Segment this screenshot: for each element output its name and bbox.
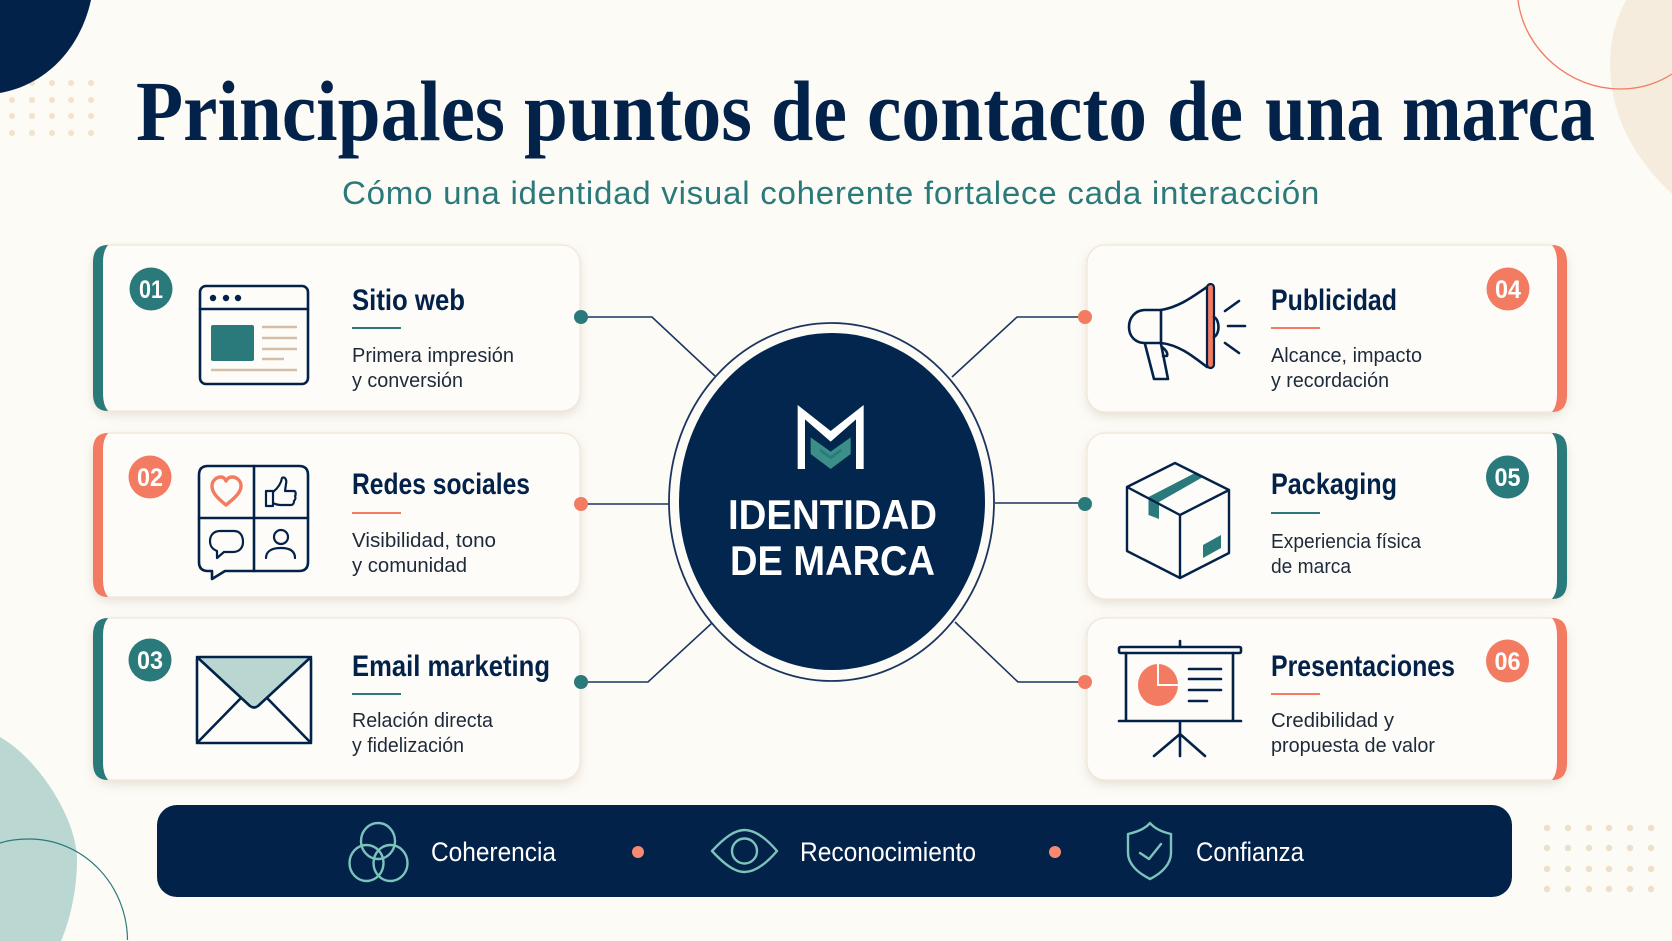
number badge 03 [128, 638, 172, 682]
icon: eye [712, 830, 777, 872]
decoration: bottom-right dots [1544, 825, 1654, 892]
connector dot [1078, 497, 1092, 511]
heading: Sitio web [352, 284, 465, 317]
number badge 05: 05 [1494, 464, 1521, 492]
subtitle: Cómo una identidad visual coherente fortalece cada interacción [342, 175, 1320, 211]
label: reconocimiento: Reconocimiento [800, 837, 976, 867]
number badge 04: 04 [1495, 276, 1521, 304]
heading: Email marketing [352, 650, 550, 683]
hub label: DE MARCA [730, 537, 935, 584]
panel: 04 publicidad [1078, 245, 1567, 412]
label: coherencia: Coherencia [431, 837, 557, 867]
panel: 01 sitio web [93, 245, 588, 411]
description: propuesta de valor [1271, 735, 1435, 757]
separator dot [632, 846, 644, 858]
decoration: top-left navy blob [0, 0, 91, 93]
description: Experiencia física [1271, 531, 1422, 553]
description: y conversión [352, 370, 463, 392]
connector lines [587, 317, 1084, 682]
icon: M logo [798, 405, 864, 469]
number badge 02 [128, 456, 172, 498]
hub label: IDENTIDAD [728, 491, 937, 538]
number badge 06: 06 [1494, 648, 1520, 676]
decoration: top-left dots [9, 80, 94, 136]
number badge 05 [1486, 456, 1529, 498]
title: de [771, 63, 847, 159]
decoration: top-right coral ring [1518, 0, 1672, 89]
panel: 02 redes sociales [93, 433, 588, 597]
description: Visibilidad, tono [352, 530, 496, 552]
central hub: identidad de marca [669, 323, 994, 681]
number badge 03: 03 [137, 647, 163, 675]
icon: box [1127, 463, 1229, 578]
number badge 01: 01 [139, 276, 163, 304]
panel: 05 packaging [1078, 433, 1567, 599]
heading: Redes sociales [352, 468, 530, 501]
decoration: bottom-left teal ring [0, 839, 128, 940]
icon: presentation board [1119, 641, 1241, 756]
icon: shield [1128, 823, 1171, 879]
panel: 06 presentaciones [1078, 618, 1567, 780]
panel: 03 email marketing [93, 618, 588, 780]
description: de marca [1271, 556, 1352, 578]
description: Primera impresión [352, 345, 514, 367]
heading: Packaging [1271, 468, 1397, 501]
number badge 01 [130, 268, 172, 310]
icon: browser window [200, 286, 308, 384]
description: y comunidad [352, 555, 467, 577]
description: Alcance, impacto [1271, 345, 1422, 367]
icon: social grid [199, 466, 308, 579]
description: y fidelización [352, 735, 464, 757]
title: contacto [867, 63, 1147, 159]
number badge 02: 02 [137, 464, 163, 492]
description: y recordación [1271, 370, 1389, 392]
connector dot [1078, 310, 1092, 324]
icon: megaphone [1129, 284, 1245, 379]
connector dot [574, 675, 588, 689]
connector dot [574, 310, 588, 324]
hub label [728, 491, 937, 584]
panel: bottom values bar [157, 805, 1512, 897]
decoration: bottom-left teal blob [0, 737, 77, 941]
label: confianza: Confianza [1196, 837, 1305, 867]
title: Principales [136, 63, 505, 159]
number badge 06 [1486, 640, 1529, 682]
heading: Presentaciones [1271, 650, 1455, 683]
number badge 04 [1486, 268, 1530, 310]
separator dot [1049, 846, 1061, 858]
description: Credibilidad y [1271, 710, 1394, 732]
decoration: top-right tan blob [1610, 0, 1672, 194]
title: de [1167, 63, 1243, 159]
title: puntos [524, 63, 752, 159]
icon: overlapping circles [350, 823, 408, 881]
description: Relación directa [352, 710, 494, 732]
icon: envelope [197, 657, 311, 743]
connector dot [574, 497, 588, 511]
connector dot [1078, 675, 1092, 689]
title: marca [1402, 63, 1595, 159]
title: una [1265, 63, 1383, 159]
heading: Publicidad [1271, 284, 1397, 317]
